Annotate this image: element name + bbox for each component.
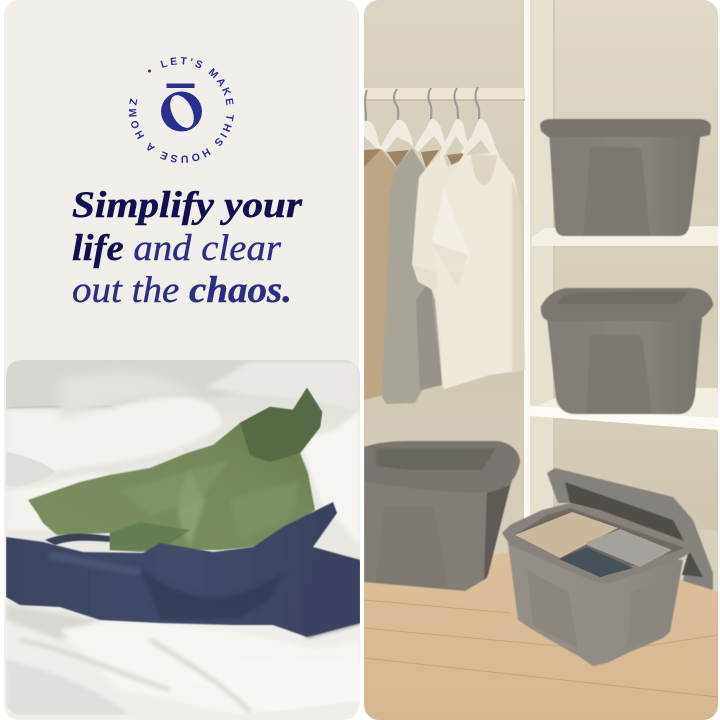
logo: circular badge (129, 57, 234, 163)
white hangers (364, 119, 499, 160)
cream shirt (412, 152, 460, 389)
logo dot (148, 70, 151, 72)
white t-shirt (432, 153, 525, 389)
floor plank lines (364, 600, 718, 697)
folded beige sweater (515, 512, 618, 558)
white shelf upright (524, 0, 555, 520)
title line 2: life and clear (72, 228, 282, 269)
logo letter o (161, 91, 202, 132)
photo: closet with storage boxes (364, 0, 718, 720)
photo: messy bed with clothes (6, 360, 360, 715)
navy clothing (6, 502, 360, 637)
logo bar (166, 84, 194, 88)
title line 3: out the chaos. (72, 270, 292, 311)
closet wall right (555, 0, 718, 531)
lower shelf (530, 388, 718, 430)
storage box: middle shelf (541, 288, 713, 414)
panel: left cream background (4, 0, 359, 720)
brown collars and hanger necks (364, 149, 464, 170)
green shirt (28, 388, 322, 552)
tan shirt (364, 149, 396, 400)
folded teal cloth (559, 547, 633, 577)
open storage box (502, 503, 692, 666)
closet wall left (364, 0, 524, 600)
folded grey cloth (587, 529, 672, 567)
storage box: floor left (364, 441, 520, 591)
logo ring text: LET'S MAKE THIS HOUSE A HOMZ (129, 57, 234, 163)
hanger hooks (365, 87, 479, 122)
title (72, 185, 303, 311)
upper shelf (532, 226, 718, 246)
floor (364, 520, 718, 720)
grey sweater (382, 148, 442, 404)
white bedding (6, 360, 360, 715)
storage box: top shelf (540, 119, 711, 236)
open lid (547, 468, 713, 590)
baseboard (680, 529, 718, 592)
title line 1: Simplify your (72, 185, 303, 226)
clothes rod (364, 88, 525, 101)
